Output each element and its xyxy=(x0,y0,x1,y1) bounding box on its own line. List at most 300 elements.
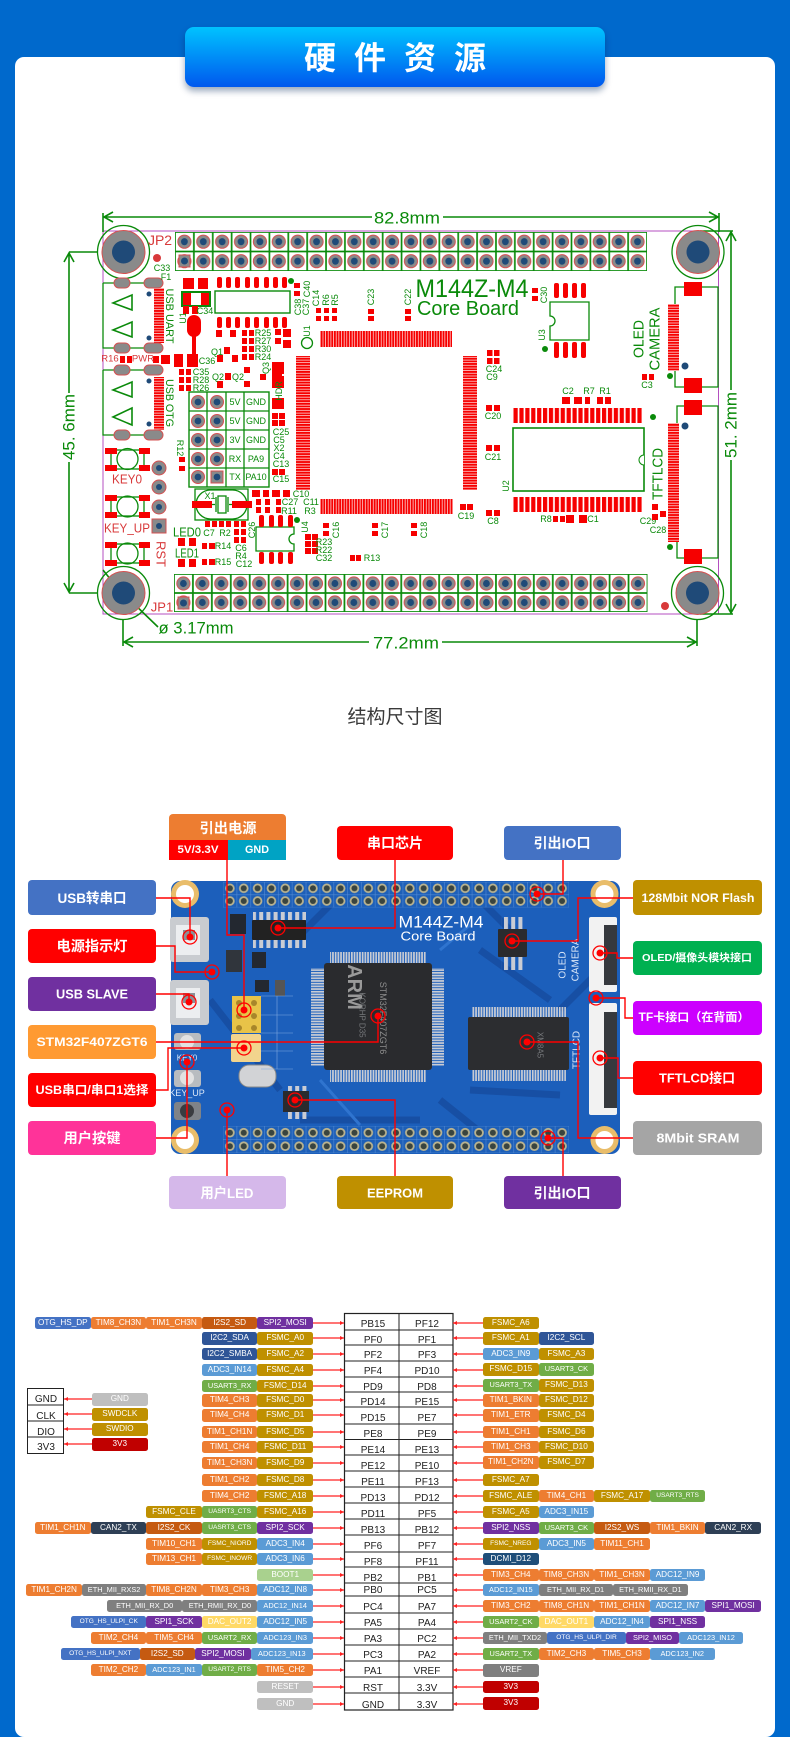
dimension: 82.8mm xyxy=(103,208,719,232)
main pin table: PA3 xyxy=(364,1634,383,1645)
LED footprints and nearby passives: C12 xyxy=(236,559,252,569)
left functions: GND: GND xyxy=(276,1698,294,1708)
bottom header pins xyxy=(223,1126,569,1153)
LED footprints and nearby passives: R4 xyxy=(235,551,247,561)
label: EEPROM xyxy=(337,1176,453,1209)
dimension: 51.2mm xyxy=(700,231,740,614)
passives below MCU: C32 xyxy=(316,553,332,563)
right functions: PB12: TIM1_BKIN xyxy=(656,1522,699,1532)
STM32 MCU: STM32F407ZGT6 xyxy=(378,982,388,1054)
left functions: PD9: FSMC_D14 xyxy=(264,1380,307,1390)
right functions: PF13: FSMC_A7 xyxy=(492,1474,530,1484)
main pin table: PF8 xyxy=(364,1557,383,1568)
LED footprints and nearby passives: R15 xyxy=(215,557,231,567)
5V GND jumper header block: PA9 xyxy=(248,454,264,464)
right functions: PE9: FSMC_D6 xyxy=(547,1426,586,1436)
right arrows xyxy=(453,1323,483,1704)
buttons KEY0 KEY_UP RST: KEY0 xyxy=(112,472,142,486)
SWD signal: 3V3: 3V3 xyxy=(112,1439,127,1448)
left functions: PD13: TIM4_CH2 xyxy=(210,1490,249,1500)
right functions: PA4: ADC12_IN4 xyxy=(600,1616,644,1626)
power and USB-serial component cluster: R25 xyxy=(255,328,271,338)
mounting holes xyxy=(98,226,724,620)
SWD signal: SWDCLK: SWDCLK xyxy=(102,1409,137,1418)
U4 EEPROM footprint: U4 xyxy=(300,521,310,533)
power and USB-serial component cluster: C36 xyxy=(199,356,215,366)
right functions: PB1: ADC12_IN9 xyxy=(656,1570,699,1578)
label: NOR flash xyxy=(633,880,762,915)
main pin table: PC3 xyxy=(363,1650,383,1661)
passive components right of MCU: R7 xyxy=(583,386,595,396)
main pin table: PD13 xyxy=(360,1493,386,1504)
board silkscreen text xyxy=(169,912,582,1098)
left functions: PD14: FSMC_D0 xyxy=(266,1395,304,1404)
right functions: PE7 xyxy=(483,1409,594,1422)
left functions: PE11: TIM1_CH2 xyxy=(210,1474,249,1484)
board outline xyxy=(103,231,718,614)
buttons KEY0 KEY_UP RST: KEY_UP xyxy=(104,520,150,536)
right functions: PE7: FSMC_D4 xyxy=(547,1410,586,1419)
left functions: PC4 xyxy=(107,1600,313,1612)
right functions: PC2: ETH_MII_TXD2 xyxy=(489,1632,541,1642)
label: NOR flash: 128Mbit NOR Flash xyxy=(642,891,754,905)
main pin table: PE10 xyxy=(415,1461,440,1472)
small capacitors near top: C30 xyxy=(539,287,549,303)
capacitors beside header: C13 xyxy=(273,459,289,469)
right functions: PB12: CAN2_RX xyxy=(714,1522,752,1532)
U4 EEPROM footprint: C11 xyxy=(303,497,319,507)
label: TF card interface xyxy=(633,1001,762,1035)
power and USB-serial component cluster: F1 xyxy=(161,272,171,282)
TFTLCD connector: TFTLCD xyxy=(650,448,666,500)
label: IO breakout bottom: 引出IO口 xyxy=(534,1185,590,1201)
passive components right of MCU xyxy=(458,386,611,526)
left functions: PC4: ETH_RMII_RX_D0 xyxy=(189,1600,251,1610)
dimension: 45.6mm xyxy=(60,252,97,593)
right functions: PF3 xyxy=(483,1348,594,1360)
right functions: PD12: FSMC_ALE xyxy=(489,1490,532,1500)
right functions: PF5: ADC3_IN15 xyxy=(545,1506,588,1516)
small parts near power xyxy=(226,914,285,996)
capacitors beside header: C5 xyxy=(273,435,285,445)
label: OLED camera interface: OLED/摄像头模块接口 xyxy=(642,951,752,964)
capacitors beside header: C4 xyxy=(273,451,285,461)
board silkscreen text: KEY0 xyxy=(177,1054,198,1062)
USB-serial chip outline and pins: R6 xyxy=(321,294,331,306)
label: IO breakout top xyxy=(504,826,621,860)
U4 EEPROM footprint: R11 xyxy=(281,506,297,516)
main pin table: RST xyxy=(363,1683,383,1694)
right functions: PD12 xyxy=(483,1490,705,1502)
5V GND jumper header block: GND xyxy=(246,397,266,407)
label: user keys xyxy=(28,1121,156,1155)
label: IO breakout top: 引出IO口 xyxy=(534,835,590,851)
power and USB-serial component cluster: U1 xyxy=(178,312,188,324)
main pin table: PB13 xyxy=(361,1525,386,1536)
left functions: PB15 xyxy=(35,1317,313,1329)
left functions: PF0: FSMC_A0 xyxy=(266,1333,304,1342)
main pin table: 3.3V xyxy=(417,1683,438,1694)
power and USB-serial component cluster: R30 xyxy=(255,344,271,354)
power and USB-serial component cluster: C35 xyxy=(193,367,209,377)
5V GND jumper header block: GND xyxy=(246,435,266,445)
LED footprints and nearby passives: R14 xyxy=(215,541,231,551)
small capacitors near top: C22 xyxy=(403,289,413,305)
right functions: PD10: USART3_CK xyxy=(545,1364,588,1373)
USB-serial chip outline and pins: U1 xyxy=(302,325,312,337)
left functions: PD13 xyxy=(202,1490,313,1502)
left functions: PD11 xyxy=(146,1506,313,1518)
main pin table: PE7 xyxy=(418,1413,437,1424)
5V GND jumper header block: TX xyxy=(229,472,241,482)
U4 EEPROM footprint: R3 xyxy=(304,506,316,516)
right functions: PE7: TIM1_ETR xyxy=(491,1410,531,1419)
main pin table: PF0 xyxy=(364,1335,383,1346)
buttons KEY0 KEY_UP RST: RST xyxy=(154,541,168,567)
passive components right of MCU: R8 xyxy=(540,514,552,524)
5V GND jumper header block xyxy=(189,392,269,487)
passives below MCU: R23 xyxy=(316,537,332,547)
power and USB-serial component cluster: R27 xyxy=(255,336,271,346)
U2 SRAM footprint: U2 xyxy=(501,480,511,492)
main pin table: PE14 xyxy=(361,1445,386,1456)
TFTLCD connector: C29 xyxy=(640,516,656,526)
left functions: PD14: TIM4_CH3 xyxy=(210,1395,249,1404)
LED footprints and nearby passives: C26 xyxy=(247,522,257,538)
power and USB-serial component cluster: C33 xyxy=(154,263,170,273)
passive components right of MCU: C8 xyxy=(487,516,499,526)
left functions: PB13: UASRT3_CTS xyxy=(208,1524,251,1530)
right functions: PC5: ADC12_IN15 xyxy=(489,1584,533,1594)
USB connectors: USB OTG xyxy=(163,379,175,427)
main pin table: PD14 xyxy=(360,1397,386,1408)
right functions: PF7 xyxy=(483,1538,650,1550)
top header pins xyxy=(223,882,569,907)
dimension: hole diameter: ø 3.17mm xyxy=(158,618,234,638)
right functions: PB1: TIM8_CH3N xyxy=(544,1570,589,1578)
left functions: PF8: FSMC_INOWR xyxy=(207,1554,252,1562)
passives below MCU: R22 xyxy=(316,545,332,555)
board silkscreen text: OLED xyxy=(558,951,568,979)
passive components right of MCU: C20 xyxy=(485,411,501,421)
passives below MCU: C17 xyxy=(380,522,390,538)
right functions: PE10: FSMC_D7 xyxy=(547,1457,586,1466)
main pin table: PF13 xyxy=(415,1477,439,1488)
left functions: PB13: SPI2_SCK xyxy=(266,1522,305,1532)
right functions: PF11: DCMI_D12 xyxy=(491,1554,531,1562)
left functions: PB15: TIM1_CH3N xyxy=(151,1318,197,1326)
right functions: PA2: TIM5_CH3 xyxy=(602,1648,642,1658)
capacitors beside header: X2 xyxy=(273,443,285,453)
dimension drawing of the core board xyxy=(60,208,740,652)
TFTLCD connector: C28 xyxy=(650,525,666,535)
main pin table: PF7 xyxy=(418,1541,437,1552)
left functions: PE12 xyxy=(202,1457,313,1469)
5V GND jumper header block: RX xyxy=(229,454,241,464)
board silkscreen text: CAMERA xyxy=(570,938,582,981)
left functions: PA3: TIM2_CH4 xyxy=(99,1632,138,1642)
U3 flash footprint: U3 xyxy=(537,329,547,341)
left functions: PF4 xyxy=(202,1364,313,1376)
right functions: PB1 xyxy=(483,1568,705,1581)
crystal X1 xyxy=(192,489,252,520)
board silkscreen text: Core Board xyxy=(400,928,476,944)
right functions: PF1 xyxy=(483,1332,594,1345)
left functions: PC3: SPI2_MOSI xyxy=(201,1648,245,1658)
left functions: PA5: OTG_HS_ULPI_CK xyxy=(80,1618,138,1624)
SWD pin box xyxy=(27,1388,64,1454)
left functions: PB13 xyxy=(35,1522,313,1534)
left functions: PB13: I2S2_CK xyxy=(158,1522,190,1532)
right functions: PD10: FSMC_D15 xyxy=(489,1364,532,1373)
right functions: PD8 xyxy=(483,1379,594,1392)
board name silkscreen: M144Z-M4 xyxy=(416,275,529,303)
right functions: PF7: ADC3_IN5 xyxy=(547,1538,586,1548)
main pin table: PA2 xyxy=(418,1650,437,1661)
main pin table: PD10 xyxy=(414,1366,440,1377)
left functions: PF2: FSMC_A2 xyxy=(266,1348,304,1358)
LED footprints and nearby passives: C6 xyxy=(235,543,247,553)
label: SRAM: 8Mbit SRAM xyxy=(656,1130,740,1146)
label: EEPROM: EEPROM xyxy=(367,1186,423,1200)
SWD signal: SWDIO: SWDIO xyxy=(106,1424,134,1433)
left functions: PA3: TIM5_CH4 xyxy=(154,1632,194,1642)
left functions: PE8: TIM1_CH1N xyxy=(207,1426,252,1436)
pinout table and arrows xyxy=(27,1312,483,1711)
push buttons xyxy=(174,1033,201,1120)
main pin table: PF3 xyxy=(418,1350,437,1361)
passive components right of MCU: C2 xyxy=(562,386,574,396)
left functions: PA5: SPI1_SCK xyxy=(154,1616,194,1626)
left functions: PD11: UASRT3_CTS xyxy=(208,1508,251,1514)
left functions: PF8: TIM13_CH1 xyxy=(152,1554,196,1562)
main pin table: PC4 xyxy=(363,1602,383,1613)
main pin table: PE9 xyxy=(418,1429,437,1440)
right functions: PB12: SPI2_NSS xyxy=(491,1522,530,1532)
label: TFTLCD interface xyxy=(633,1061,762,1095)
5V GND jumper header block: 5V xyxy=(229,416,241,426)
main pin table: PD12 xyxy=(414,1493,440,1504)
crystal xyxy=(239,1065,276,1087)
title banner: 硬件资源 xyxy=(304,33,504,79)
left functions: PB13: TIM1_CH1N xyxy=(40,1522,86,1532)
left functions: PA3: USART2_RX xyxy=(208,1632,251,1642)
left functions: PF4: FSMC_A4 xyxy=(266,1364,304,1374)
left functions: PA1: TIM2_CH2 xyxy=(99,1664,138,1674)
main pin table: PB0 xyxy=(364,1585,383,1596)
right functions: PA7: ADC12_IN7 xyxy=(656,1600,699,1610)
right functions: PD12: FSMC_A17 xyxy=(601,1490,643,1500)
main pin table: PF5 xyxy=(418,1509,437,1520)
capacitors beside header: C25 xyxy=(273,427,289,437)
passives below MCU: C18 xyxy=(419,522,429,538)
right functions: PA2: USART2_TX xyxy=(490,1648,532,1658)
label: power header: 5V/3.3V xyxy=(178,844,219,856)
right functions: PA4: USART2_CK xyxy=(489,1616,532,1626)
USB-serial chip outline and pins: C14 xyxy=(311,290,321,306)
power and USB-serial component cluster: Q3 xyxy=(261,362,271,374)
main pin table: PE8 xyxy=(364,1429,383,1440)
left functions: PF6: TIM10_CH1 xyxy=(152,1538,196,1548)
LED footprints and nearby passives: LED0 xyxy=(173,524,201,540)
left functions: PE8 xyxy=(202,1426,313,1438)
left functions: PB13: CAN2_TX xyxy=(100,1522,137,1532)
left functions: PC3: OTG_HS_ULPI_NXT xyxy=(69,1650,131,1656)
top pin header JP2 xyxy=(148,232,647,271)
left functions: PD15: TIM4_CH4 xyxy=(210,1410,249,1419)
main pin table: PF4 xyxy=(364,1366,383,1377)
label: IO breakout bottom xyxy=(504,1176,621,1209)
leader lines and target rings xyxy=(156,860,633,1176)
main pin table: PC5 xyxy=(417,1585,437,1596)
USB-serial chip outline and pins: C38 xyxy=(293,299,303,315)
left functions: RST: RESET xyxy=(272,1682,299,1690)
left functions: PC3: ADC123_IN13 xyxy=(258,1648,306,1658)
U3 flash footprint xyxy=(537,283,589,358)
right functions: PF3: FSMC_A3 xyxy=(548,1348,585,1358)
left functions: PF6: ADC3_IN4 xyxy=(266,1538,305,1548)
capacitors beside header: HDR xyxy=(274,381,284,401)
left arrows xyxy=(313,1323,344,1704)
buttons KEY0 KEY_UP RST: R12 xyxy=(175,440,185,456)
left functions: PD14 xyxy=(202,1394,313,1407)
U4 EEPROM footprint: C27 xyxy=(282,497,298,507)
right functions: PD12: USART3_RTS xyxy=(656,1492,699,1498)
left functions: PA1: TIM5_CH2 xyxy=(265,1664,305,1674)
label: power LED: 电源指示灯 xyxy=(56,938,128,954)
FPC connectors xyxy=(589,917,617,1115)
main pin table: PE11 xyxy=(361,1477,385,1488)
label: SRAM xyxy=(633,1121,762,1155)
SWD pin box: CLK xyxy=(36,1411,56,1422)
main pin table: PF2 xyxy=(364,1350,383,1361)
silkscreen table beside header xyxy=(261,996,293,1069)
crystal X1: X1 xyxy=(204,491,216,501)
right functions: PA7 xyxy=(483,1600,761,1612)
left functions: PD13: FSMC_A18 xyxy=(264,1490,306,1500)
right functions: PE13: FSMC_D10 xyxy=(545,1442,588,1450)
label: serial chip: 串口芯片 xyxy=(367,835,423,851)
left functions: PB15: OTG_HS_DP xyxy=(38,1318,88,1326)
power and USB-serial component cluster xyxy=(101,263,291,393)
right functions: PC2 xyxy=(483,1632,743,1644)
right functions: PC2: OTG_HS_ULPI_DIR xyxy=(556,1634,617,1640)
left functions: PB0: TIM1_CH2N xyxy=(31,1584,77,1594)
left functions: PB0: ADC12_IN8 xyxy=(263,1584,307,1594)
label: user keys: 用户按键 xyxy=(64,1130,120,1146)
right functions: PE13 xyxy=(483,1440,594,1453)
right functions: PE9 xyxy=(483,1426,594,1438)
main pin table xyxy=(344,1313,453,1711)
buttons KEY0 KEY_UP RST xyxy=(104,440,185,567)
passive components right of MCU: C1 xyxy=(587,514,599,524)
left functions: PF8: ADC3_IN6 xyxy=(266,1554,305,1562)
gold mounting holes xyxy=(171,880,618,1154)
right functions: PC5 xyxy=(483,1584,688,1596)
right functions: PE15: FSMC_D12 xyxy=(545,1395,588,1404)
right functions: PB12: USART3_CK xyxy=(545,1522,588,1532)
right functions: PB12: I2S2_WS xyxy=(605,1522,639,1532)
main pin table: PF11 xyxy=(415,1557,439,1568)
U2 SRAM footprint xyxy=(501,408,644,512)
left functions: PE8: FSMC_D5 xyxy=(266,1426,304,1436)
USB-serial chip outline and pins: C40 xyxy=(302,281,312,297)
OLED camera connector: CAMERA xyxy=(646,308,664,370)
right functions: PF7: FSMC_NREG xyxy=(490,1540,532,1546)
right functions: PC2: ADC123_IN12 xyxy=(687,1632,735,1642)
STM32 MCU: KORHP D35 xyxy=(358,992,366,1038)
right functions: PE15 xyxy=(483,1394,594,1407)
OLED camera connector: C3 xyxy=(641,380,653,390)
passive components right of MCU: C19 xyxy=(458,511,474,521)
passive components right of MCU: R1 xyxy=(599,386,611,396)
board name silkscreen xyxy=(416,275,529,320)
right functions: VREF: VREF xyxy=(500,1665,522,1674)
label: OLED camera interface xyxy=(633,941,762,975)
left functions: PF2: I2C2_SMBA xyxy=(207,1348,252,1358)
right functions: PA7: TIM1_CH1N xyxy=(599,1600,645,1610)
right functions: PD8: USART3_TX xyxy=(490,1380,532,1389)
label: user LED: 用户LED xyxy=(200,1185,254,1201)
right functions: PB12 xyxy=(483,1522,761,1534)
left functions: PB0: TIM8_CH2N xyxy=(151,1584,197,1594)
label: power header xyxy=(169,814,286,860)
main pin table: PF6 xyxy=(364,1541,383,1552)
left functions: PE11: FSMC_D8 xyxy=(266,1474,304,1484)
power and USB-serial component cluster: R16 xyxy=(101,354,119,364)
main pin table: PD11 xyxy=(361,1509,386,1520)
label: TFTLCD interface: TFTLCD接口 xyxy=(659,1070,735,1086)
right functions: PC5: ETH_RMII_RX_D1 xyxy=(619,1584,682,1594)
board silkscreen text: TFTLCD xyxy=(572,1031,582,1069)
USB connectors xyxy=(103,278,175,440)
dimension: 45.6mm: 45. 6mm xyxy=(60,394,78,460)
right functions: PA7: TIM8_CH1N xyxy=(544,1600,589,1610)
SWD pin box: DIO xyxy=(37,1427,55,1438)
left functions: PB0: TIM3_CH3 xyxy=(210,1584,249,1594)
dimension: 77.2mm xyxy=(123,620,697,652)
right functions: PB1: TIM3_CH4 xyxy=(491,1570,531,1578)
OLED camera connector xyxy=(630,282,718,393)
right functions: PF3: ADC3_IN9 xyxy=(491,1348,530,1358)
right functions: PA4: DAC_OUT1 xyxy=(545,1616,588,1626)
USB connectors xyxy=(170,917,209,1025)
right functions: PC5: ETH_MII_RX_D1 xyxy=(547,1584,604,1594)
small capacitors near top: C24 xyxy=(486,364,502,374)
left functions: PD11: FSMC_A16 xyxy=(264,1506,306,1516)
U4 EEPROM footprint: C10 xyxy=(293,489,309,499)
left functions: PE14: TIM1_CH4 xyxy=(210,1442,249,1450)
main pin table: PB1 xyxy=(418,1573,437,1584)
SWD pin box: 3V3 xyxy=(37,1442,55,1453)
label: USB slave xyxy=(28,977,156,1011)
capacitors beside header: C15 xyxy=(273,474,289,484)
left functions: PE14 xyxy=(202,1441,313,1453)
USB-serial chip xyxy=(252,912,306,948)
label: USB serial select xyxy=(28,1073,156,1107)
LED footprints and nearby passives: R2 xyxy=(219,528,231,538)
label: power header: GND xyxy=(245,844,269,856)
right functions: PD10 xyxy=(483,1363,594,1376)
main pin table: PB12 xyxy=(415,1525,440,1536)
right functions: PF7: TIM11_CH1 xyxy=(600,1538,644,1548)
main pin table: PD9 xyxy=(363,1382,383,1393)
left functions: PF0: I2C2_SDA xyxy=(210,1333,249,1342)
U4 EEPROM footprint xyxy=(252,489,319,564)
left functions: PE14: FSMC_D11 xyxy=(264,1442,306,1450)
right functions: PA2: TIM2_CH3 xyxy=(547,1648,586,1658)
left functions: PD9 xyxy=(202,1380,313,1392)
